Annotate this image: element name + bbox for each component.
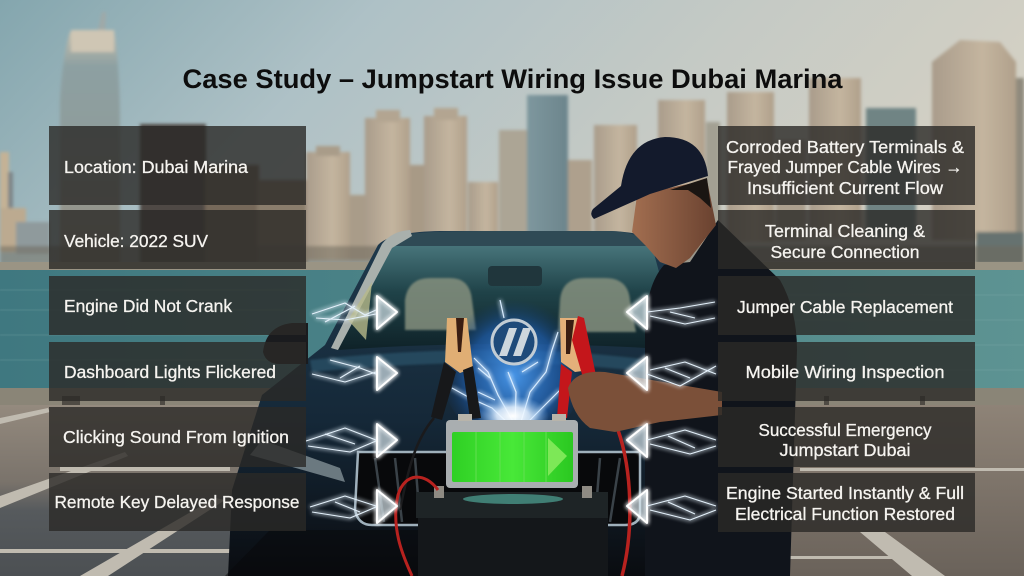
panel: successful jumpstart: Jumpstart Dubai (780, 440, 910, 460)
panel: successful jumpstart (718, 407, 975, 467)
car battery body (416, 486, 608, 576)
panel: terminal cleaning: Terminal Cleaning & (765, 221, 925, 241)
background: Dubai Marina skyline (0, 12, 1024, 270)
clamp: black (431, 318, 481, 420)
background: parking lot (0, 405, 1024, 576)
arrow: clicking sound (306, 424, 397, 457)
background: waterfront and water (0, 262, 1024, 408)
panel: remote key (49, 473, 306, 531)
panel: successful jumpstart: Successful Emergency (758, 420, 932, 440)
arrow: successful jumpstart (627, 424, 716, 457)
panel: jumper cable replacement: Jumper Cable Replacement (737, 297, 953, 317)
background: sky (0, 0, 1024, 272)
arrows: right (627, 296, 716, 523)
panel: mobile wiring inspection (718, 342, 975, 401)
panel: engine started: Engine Started Instantly & Full (726, 483, 964, 503)
panel: remote key: Remote Key Delayed Response (54, 492, 300, 512)
technician: cap (591, 137, 708, 219)
panel: root cause: Frayed Jumper Cable Wires → (728, 157, 962, 177)
panel: terminal cleaning (718, 210, 975, 269)
battery spark (477, 396, 549, 436)
panel: engine did not crank (49, 276, 306, 335)
technician: hair (670, 178, 711, 208)
panel: vehicle (49, 210, 306, 269)
panel: vehicle: Vehicle: 2022 SUV (64, 231, 208, 251)
panel: terminal cleaning: Secure Connection (770, 242, 920, 262)
car (225, 230, 700, 576)
arrow: mobile wiring inspection (627, 357, 716, 390)
panel: jumper cable replacement (718, 276, 975, 335)
cable: red right (618, 430, 630, 576)
panel: root cause: Insufficient Current Flow (747, 178, 943, 198)
technician (568, 137, 797, 576)
panel: engine did not crank: Engine Did Not Crank (64, 296, 232, 316)
lightning from battery (452, 300, 560, 425)
panel: clicking sound (49, 407, 306, 467)
icon: car badge (492, 320, 536, 364)
panel: root cause (718, 126, 975, 205)
panel: symptoms and vehicle facts (49, 126, 306, 531)
panel: root cause: Corroded Battery Terminals & (726, 137, 964, 157)
title: Case Study – Jumpstart Wiring Issue Dubai Marina (182, 64, 843, 94)
panel: diagnosis and fixes (718, 126, 975, 532)
arrow: engine started (627, 490, 716, 523)
blue electric glow (441, 292, 585, 444)
panel: engine started (718, 473, 975, 532)
panel: dashboard lights (49, 342, 306, 401)
panel: location (49, 126, 306, 205)
car: grille (355, 452, 640, 525)
technician: arm and hand (568, 372, 722, 432)
battery charge display (446, 414, 578, 488)
panel: mobile wiring inspection: Mobile Wiring Inspection (746, 362, 944, 382)
car: side mirror (263, 323, 308, 364)
car: headlight (250, 440, 345, 482)
car: hood highlight (310, 350, 650, 372)
car: seats (405, 278, 636, 332)
panel: location: Location: Dubai Marina (64, 157, 248, 177)
panel: clicking sound: Clicking Sound From Ignition (63, 427, 289, 447)
arrow: remote key (310, 490, 397, 523)
arrow: dashboard lights flickered (312, 357, 397, 390)
panel: dashboard lights: Dashboard Lights Flickered (64, 362, 276, 382)
arrows: left (306, 296, 397, 523)
panel: engine started: Electrical Function Restored (735, 504, 955, 524)
clamp: red (557, 316, 598, 418)
arrow: jumper cable replacement (627, 296, 715, 329)
technician: torso (645, 220, 797, 576)
arrow: engine did not crank (312, 296, 397, 329)
cable: red left (396, 477, 438, 576)
cable: black (400, 418, 434, 510)
technician: neck and face (632, 180, 716, 268)
